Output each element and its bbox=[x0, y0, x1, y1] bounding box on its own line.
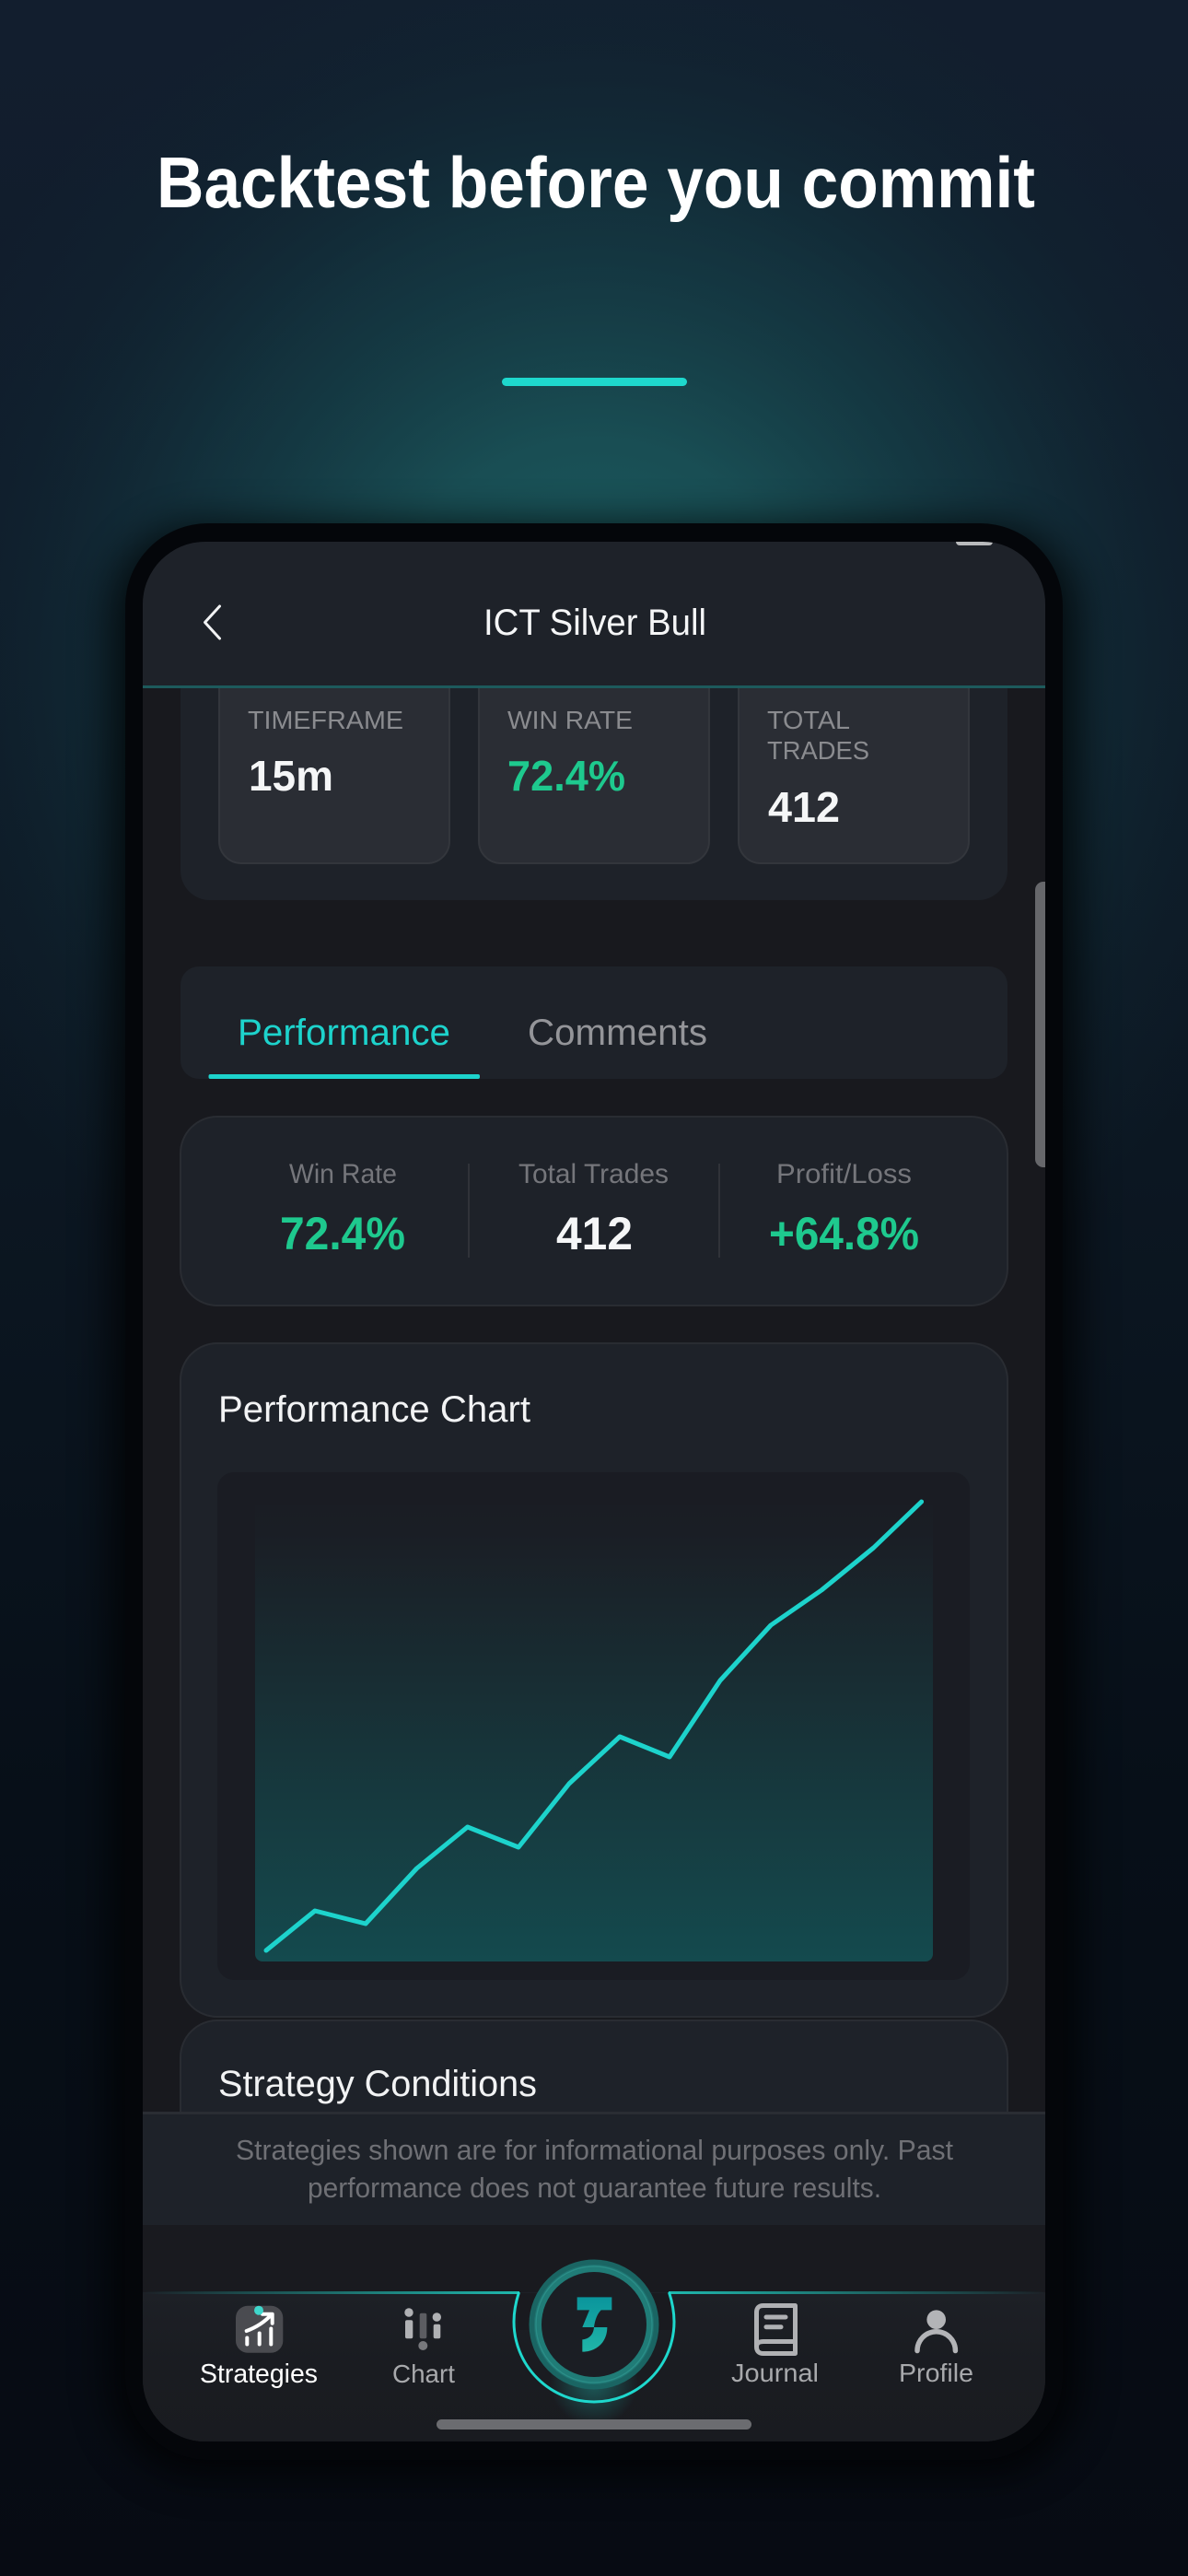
nav item: strategies: Strategies bbox=[200, 2359, 318, 2389]
disclaimer: performance does not guarantee future results. bbox=[308, 2172, 881, 2204]
logo mark bbox=[577, 2297, 611, 2352]
panel: strategy conditions bbox=[180, 2020, 1008, 2112]
disclaimer: Strategies shown are for informational purposes only. Past bbox=[236, 2134, 953, 2166]
accent bar bbox=[502, 378, 687, 386]
disclaimer bbox=[143, 2112, 1045, 2225]
panel: performance chart: Performance Chart bbox=[218, 1389, 530, 1430]
centre button glow bbox=[555, 2377, 633, 2419]
phone shadow bbox=[111, 523, 1077, 2476]
active tab underline bbox=[208, 1074, 480, 1079]
nav top line left bbox=[143, 2291, 519, 2294]
panel: key metrics: +64.8% bbox=[769, 1208, 919, 1259]
home indicator bbox=[437, 2419, 751, 2430]
stat card: timeframe bbox=[218, 688, 450, 864]
panel: key metrics: Win Rate bbox=[289, 1159, 397, 1189]
panel: strategy summary bbox=[181, 688, 1007, 900]
centre notch curve bbox=[514, 2292, 674, 2402]
title: Backtest before you commit bbox=[157, 142, 1035, 223]
stat card: timeframe: 15m bbox=[249, 752, 333, 800]
panel: performance chart bbox=[181, 1343, 1007, 2017]
stat card: timeframe: TIMEFRAME bbox=[248, 706, 403, 734]
panel: strategy conditions: Strategy Conditions bbox=[218, 2064, 537, 2104]
nav item: journal: Journal bbox=[731, 2359, 819, 2387]
phone mockup bbox=[125, 523, 1063, 2460]
phone bezel bbox=[125, 523, 1063, 2460]
tab bar: Comments bbox=[528, 1013, 707, 1053]
stat card: total trades bbox=[738, 688, 970, 864]
stat card: total trades: TRADES bbox=[767, 736, 869, 765]
panel: key metrics: Profit/Loss bbox=[776, 1159, 912, 1189]
app header: ICT Silver Bull bbox=[483, 603, 706, 643]
nav item: chart bbox=[392, 2308, 455, 2388]
line chart bbox=[255, 1500, 933, 1961]
back arrow icon bbox=[204, 606, 219, 638]
panel: key metrics: Total Trades bbox=[518, 1159, 669, 1189]
nav item: profile bbox=[899, 2310, 973, 2387]
nav item: journal bbox=[731, 2305, 819, 2387]
stat card: win rate: WIN RATE bbox=[507, 706, 633, 734]
nav item: chart: Chart bbox=[392, 2359, 455, 2388]
stat card: win rate: 72.4% bbox=[507, 752, 625, 800]
stat card: total trades: 412 bbox=[768, 783, 840, 831]
app screen bbox=[143, 536, 1054, 2441]
nav top line right bbox=[669, 2291, 1045, 2294]
app header bbox=[143, 536, 1045, 688]
tab bar: Performance bbox=[238, 1013, 450, 1053]
stat card: win rate bbox=[478, 688, 710, 864]
scrollbar bbox=[1035, 882, 1045, 1167]
panel: key metrics bbox=[181, 1117, 1007, 1306]
nav item: strategies bbox=[200, 2306, 318, 2389]
panel: key metrics: 412 bbox=[556, 1208, 633, 1259]
nav item: profile: Profile bbox=[899, 2359, 973, 2387]
panel: key metrics: 72.4% bbox=[280, 1208, 405, 1259]
status indicator fragment bbox=[956, 536, 993, 545]
bottom navigation bbox=[143, 2259, 1045, 2441]
tab bar bbox=[181, 966, 1007, 1079]
centre logo button bbox=[529, 2259, 659, 2390]
stat card: total trades: TOTAL bbox=[767, 706, 850, 734]
